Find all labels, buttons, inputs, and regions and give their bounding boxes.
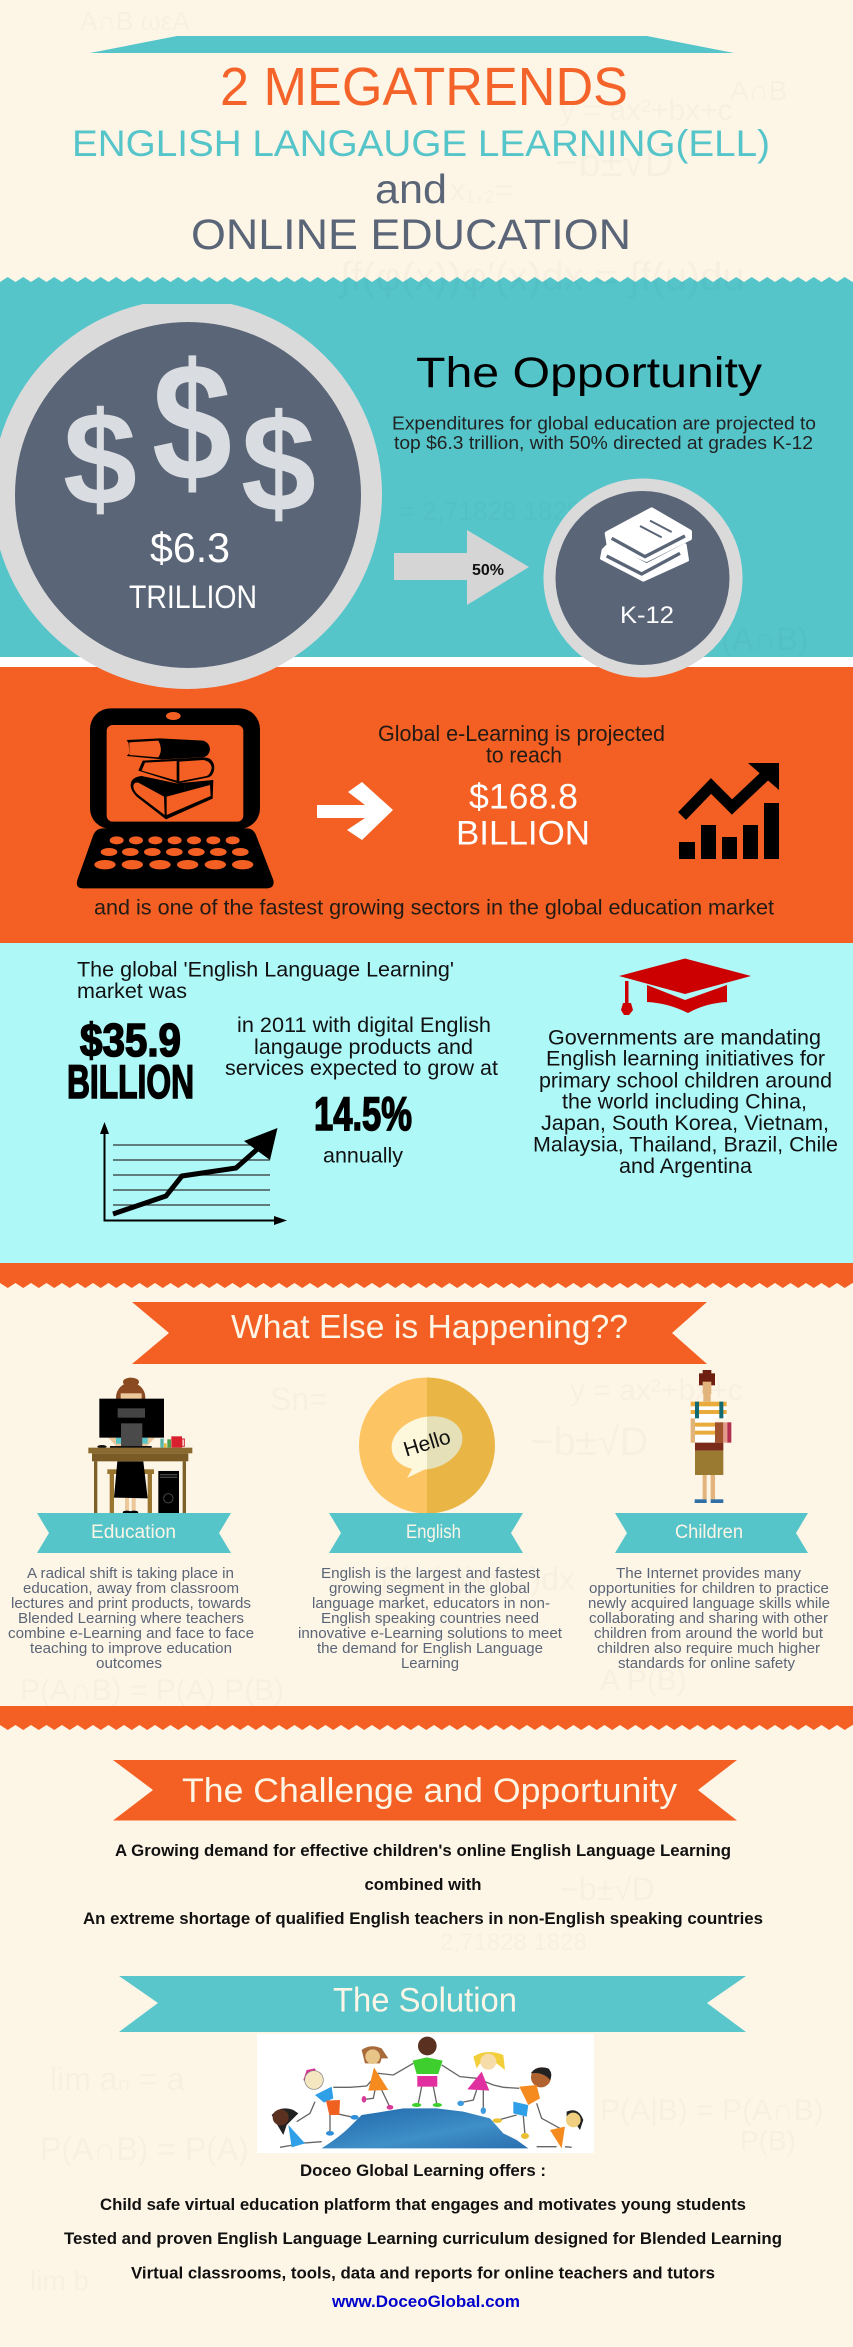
icon: dollar signs: $ (152, 328, 232, 516)
text: children: opportunities for children to practice (589, 1580, 829, 1597)
text: english: English speaking countries need (321, 1610, 539, 1627)
ribbon: what else is happening: What Else is Happening?? (231, 1308, 628, 1345)
solution text: Child safe virtual education platform that engages and motivates young students (100, 2196, 746, 2214)
text: children: The Internet provides many (616, 1565, 802, 1582)
solution text: Doceo Global Learning offers : (300, 2162, 546, 2180)
background math formulas: P(A∩B) = P(A) P(B) (20, 1674, 284, 1707)
icon: dollar signs: $ (63, 386, 137, 534)
opportunity text: top $6.3 trillion, with 50% directed at grades K-12 (394, 433, 813, 453)
e-learning text: to reach (486, 742, 562, 768)
ribbon: the challenge and opportunity (113, 1760, 737, 1820)
icon: student with backpack (691, 1370, 731, 1503)
solution text: Virtual classrooms, tools, data and reports for online teachers and tutors (131, 2265, 715, 2283)
text: education (8, 1565, 254, 1672)
text: english: growing segment in the global (329, 1580, 530, 1597)
growth text: in 2011 with digital English (237, 1014, 491, 1037)
title line 2: ENGLISH LANGAUGE LEARNING(ELL) (72, 123, 770, 164)
ribbon: children (615, 1513, 808, 1553)
challenge text: combined with (364, 1876, 482, 1894)
background math formulas: x₁,₂= (450, 174, 513, 207)
market intro text (77, 958, 454, 1003)
text: english: English is the largest and fastest (321, 1565, 541, 1582)
title line 1: 2 MEGATRENDS (220, 57, 628, 117)
opportunity text: Expenditures for global education are projected to (392, 414, 816, 434)
governments text: and Argentina (619, 1155, 752, 1178)
challenge text: An extreme shortage of qualified English teachers in non-English speaking countries (83, 1910, 763, 1928)
icon: graduation cap (619, 958, 751, 1015)
panel: opportunity teal background (0, 277, 853, 667)
e-learning footer text: and is one of the fastest growing sectors in the global education market (94, 896, 774, 920)
annually label: annually (323, 1144, 404, 1168)
text: english: innovative e-Learning solutions to meet (298, 1625, 563, 1642)
text: education: A radical shift is taking place in (27, 1565, 234, 1582)
e-learning text (378, 721, 665, 852)
line chart (100, 1122, 287, 1225)
growth text: services expected to grow at (225, 1057, 498, 1080)
ribbon: education: Education (91, 1522, 176, 1543)
unit: TRILLION (129, 579, 257, 615)
arrow: 50 percent: 50% (472, 562, 504, 579)
background math formulas: A∩B (730, 75, 787, 106)
title block (72, 36, 770, 259)
ribbon: education (37, 1513, 231, 1553)
background math formulas: P(A∩B) (700, 621, 808, 657)
text: education: Blended Learning where teachers (18, 1610, 244, 1627)
amount: $6.3 (150, 524, 230, 571)
background math formulas: P(A|B) = P(A∩B) (600, 2094, 824, 2127)
market intro text: The global 'English Language Learning' (77, 958, 454, 982)
background math formulas: −b±√D (530, 1420, 648, 1464)
background math formulas: P(A∩B) = P(A) (40, 2131, 249, 2167)
icon: hello speech bubble (359, 1378, 495, 1514)
challenge text (83, 1842, 763, 1928)
text: education: education, away from classroom (23, 1580, 239, 1597)
hello text: Hello (401, 1425, 453, 1461)
text: children: children also require much higher (597, 1640, 820, 1657)
text: education: teaching to improve education (30, 1640, 232, 1657)
icon: books (602, 509, 690, 580)
text: education: outcomes (96, 1655, 162, 1672)
icon: growth chart (679, 763, 779, 859)
solution text: Tested and proven English Language Learning curriculum designed for Blended Learning (64, 2230, 782, 2248)
illustration: children holding hands around the globe (257, 2034, 594, 2153)
panel: english language learning (0, 943, 853, 1263)
ribbon: what else is happening (132, 1302, 707, 1364)
panel: e-learning orange background (0, 667, 853, 943)
governments text: Malaysia, Thailand, Brazil, Chile (533, 1133, 838, 1156)
ribbon: children: Children (675, 1522, 743, 1543)
growth text (225, 1014, 498, 1080)
solution text (64, 2162, 782, 2283)
big number: 14.5 percent: 14.5% (314, 1087, 412, 1140)
title top bar (90, 36, 734, 53)
text: children (588, 1565, 830, 1672)
circle: K-12 (544, 478, 742, 678)
website link: www.DoceoGlobal.com (331, 2292, 520, 2311)
background math formulas: −b±√D (560, 1871, 655, 1907)
background math formulas: 2,71828 1828 (440, 1929, 587, 1956)
background math formulas: y = ax²+bx+c (570, 1374, 743, 1407)
market intro text: market was (77, 980, 187, 1003)
icon: dollar signs: $ (241, 386, 316, 541)
background math formulas: ∫f(φ(x))φ′(x)dx = ∫f(u)du (338, 255, 745, 299)
background math formulas: P(B) (740, 2125, 796, 2156)
background math formulas: Sn= (270, 1381, 328, 1417)
text: english: language market, educators in non- (312, 1595, 550, 1612)
ribbon: english: English (406, 1522, 461, 1543)
background math formulas: y = ax²+bx+c (560, 94, 733, 127)
icon: dollar signs (63, 328, 316, 541)
background math formulas: lim aₙ = a (50, 2061, 185, 2097)
icon: laptop with books (77, 708, 274, 888)
arrow: white right (317, 782, 393, 840)
big number: 35.9 billion (67, 1014, 194, 1108)
circle: 6.3 trillion (0, 299, 382, 689)
opportunity text (392, 414, 816, 453)
big number: 35.9 billion: BILLION (67, 1055, 194, 1108)
title line 4: ONLINE EDUCATION (191, 211, 631, 259)
governments text: the world including China, (562, 1090, 807, 1114)
background math formulas: ∫f(φ(x))φ′(x)dx (378, 1561, 575, 1597)
governments text: English learning initiatives for (546, 1048, 825, 1071)
challenge text: A Growing demand for effective children's online English Language Learning (115, 1842, 731, 1860)
text: children: children from around the world but (594, 1625, 824, 1642)
e-learning text: Global e-Learning is projected (378, 721, 665, 746)
growth text: langauge products and (254, 1036, 473, 1059)
background math formulas: = 2,71828 1828 (400, 496, 581, 526)
governments text: Japan, South Korea, Vietnam, (541, 1112, 829, 1135)
text: education: lectures and print products, towards (11, 1595, 251, 1612)
governments text: primary school children around (539, 1070, 832, 1092)
text: children: standards for online safety (618, 1655, 796, 1672)
icon: woman at computer (88, 1378, 192, 1514)
e-learning text: BILLION (456, 814, 590, 852)
ribbon: the challenge and opportunity: The Challenge and Opportunity (182, 1772, 677, 1810)
background math formulas: A∩B ωεA (80, 6, 190, 36)
ribbon: the solution: The Solution (333, 1982, 517, 2020)
label: K-12 (620, 602, 674, 629)
ribbon: english (329, 1513, 523, 1553)
big number: 35.9 billion: $35.9 (80, 1014, 181, 1066)
orange divider bottom (0, 1706, 853, 1730)
arrow: 50 percent (394, 530, 529, 605)
text: children: newly acquired language skills while (588, 1595, 830, 1612)
governments text: Governments are mandating (548, 1027, 821, 1050)
orange divider top (0, 1263, 853, 1288)
background math formulas: −b±√D (555, 141, 673, 185)
amount: $168.8 (469, 778, 578, 816)
ribbon: the solution (119, 1976, 746, 2032)
background math formulas: lim b (30, 2265, 89, 2296)
text: english (298, 1565, 563, 1672)
heading: the opportunity: The Opportunity (416, 349, 763, 397)
text: education: combine e-Learning and face to face (8, 1625, 254, 1642)
governments text (533, 1027, 838, 1178)
text: english: the demand for English Language (317, 1640, 543, 1657)
text: children: collaborating and sharing with other (589, 1610, 828, 1627)
background math formulas: A P(B) (600, 1664, 687, 1697)
title line 3: and (375, 166, 447, 212)
text: english: Learning (401, 1655, 459, 1672)
